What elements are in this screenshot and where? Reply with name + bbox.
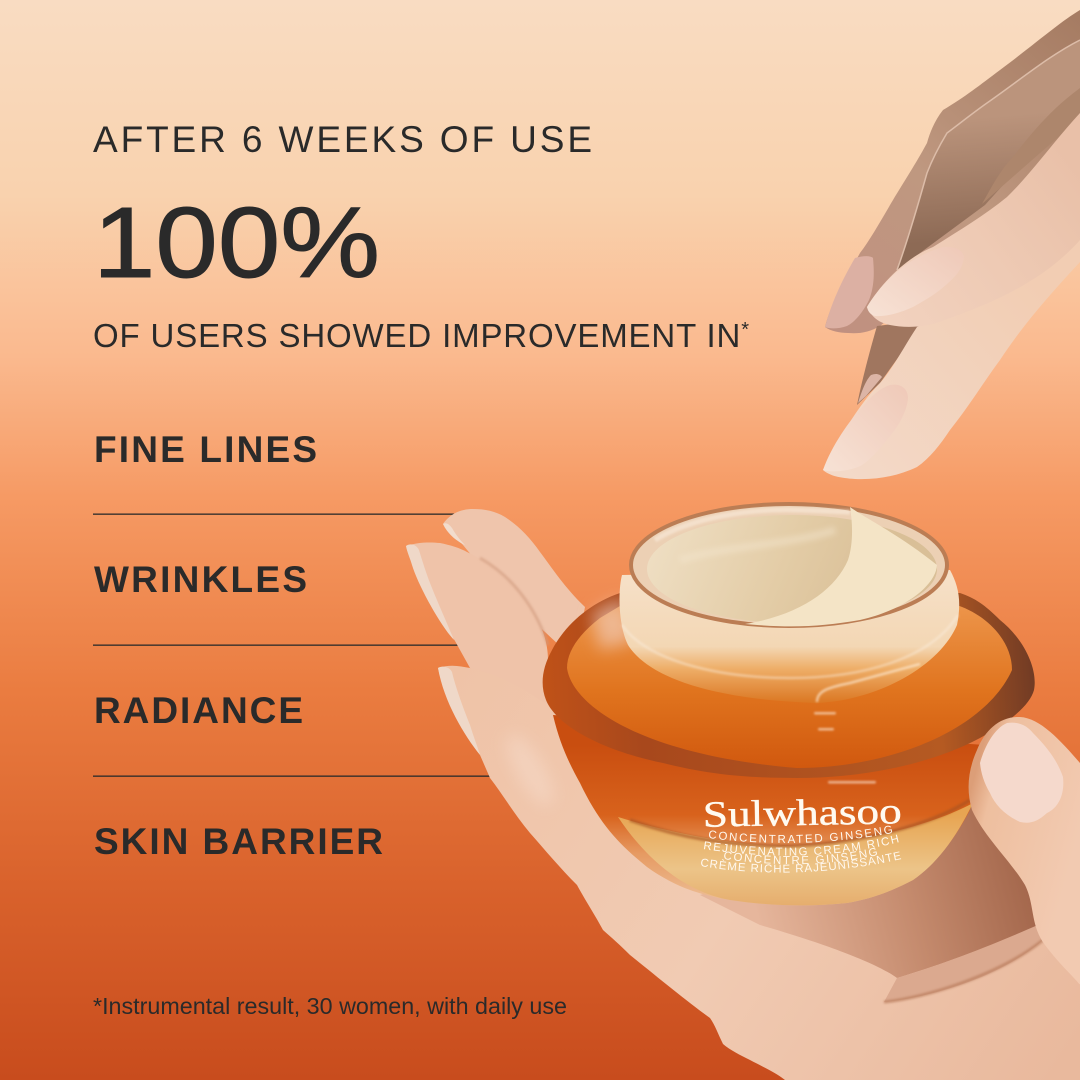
jar rim xyxy=(631,504,947,626)
shading between fingers xyxy=(480,558,548,645)
subheading: users showed improvement: OF USERS SHOWED IMPROVEMENT IN xyxy=(93,317,740,354)
top finger xyxy=(443,509,585,660)
lower hand: two upper fingers behind the jar xyxy=(406,509,585,720)
jar collar xyxy=(620,570,959,703)
upper hand reaching toward the jar xyxy=(823,10,1080,479)
nail: front finger xyxy=(438,667,480,755)
shoulder reflection xyxy=(592,598,636,650)
palm crease xyxy=(884,940,1043,1002)
product name on jar: CONCENTRÉ GINSENG xyxy=(724,848,877,864)
heading: after 6 weeks of use: AFTER 6 WEEKS OF USE xyxy=(93,119,592,160)
benefit: skin barrier: SKIN BARRIER xyxy=(94,821,383,862)
nail: back finger xyxy=(825,256,874,328)
index finger xyxy=(867,113,1080,327)
cream basin xyxy=(647,515,937,623)
product jar xyxy=(542,502,1035,906)
nail: middle finger xyxy=(406,544,454,640)
lower finger xyxy=(823,225,1080,479)
benefit: wrinkles: WRINKLES xyxy=(94,559,307,600)
product name on jar: CONCENTRATED GINSENG xyxy=(709,826,892,843)
lower hand: front finger and wrist xyxy=(438,666,1080,1080)
middle finger edge light xyxy=(897,40,1080,270)
subheading: users showed improvement: * xyxy=(741,319,749,341)
collar ring xyxy=(622,615,958,678)
third finger xyxy=(982,88,1080,204)
specular highlights xyxy=(814,712,876,784)
benefit: fine lines: FINE LINES xyxy=(94,429,317,470)
nail: top finger xyxy=(443,523,465,545)
jar base xyxy=(553,715,985,905)
nail: thumb xyxy=(980,723,1063,823)
cream swirl xyxy=(745,507,937,626)
middle finger xyxy=(897,40,1080,270)
cream soft fold xyxy=(680,530,835,560)
benefit: radiance: RADIANCE xyxy=(94,690,303,731)
jar shoulder xyxy=(543,593,1035,778)
collar notch xyxy=(817,664,920,702)
footnote: *Instrumental result, 30 women, with daily use xyxy=(93,993,567,1019)
highlight on front finger xyxy=(498,728,562,812)
rim top glass xyxy=(655,510,850,540)
nail: index finger xyxy=(867,247,964,316)
dark band above gold xyxy=(630,800,970,846)
benefit list xyxy=(93,429,493,862)
pink web between thumb and palm xyxy=(884,925,1043,1002)
middle finger xyxy=(406,542,560,720)
product name on jar: CRÈME RICHE RAJEUNISSANTE xyxy=(701,852,902,873)
big statistic: 100%: 100% xyxy=(93,187,380,299)
lower hand: palm shadow behind the jar xyxy=(700,805,1038,978)
product name on jar xyxy=(701,826,902,873)
jar shoulder inner glass xyxy=(567,600,1012,768)
gap finger xyxy=(857,320,925,405)
back finger xyxy=(825,10,1080,333)
nail: partly hidden finger xyxy=(858,374,882,403)
brand name on jar: Sulwhasoo xyxy=(702,791,902,836)
product name on jar: REJUVENATING CREAM RICH xyxy=(704,834,899,856)
golden lower glass xyxy=(618,803,973,905)
nail: lower finger xyxy=(823,385,908,471)
thumb xyxy=(969,717,1080,985)
